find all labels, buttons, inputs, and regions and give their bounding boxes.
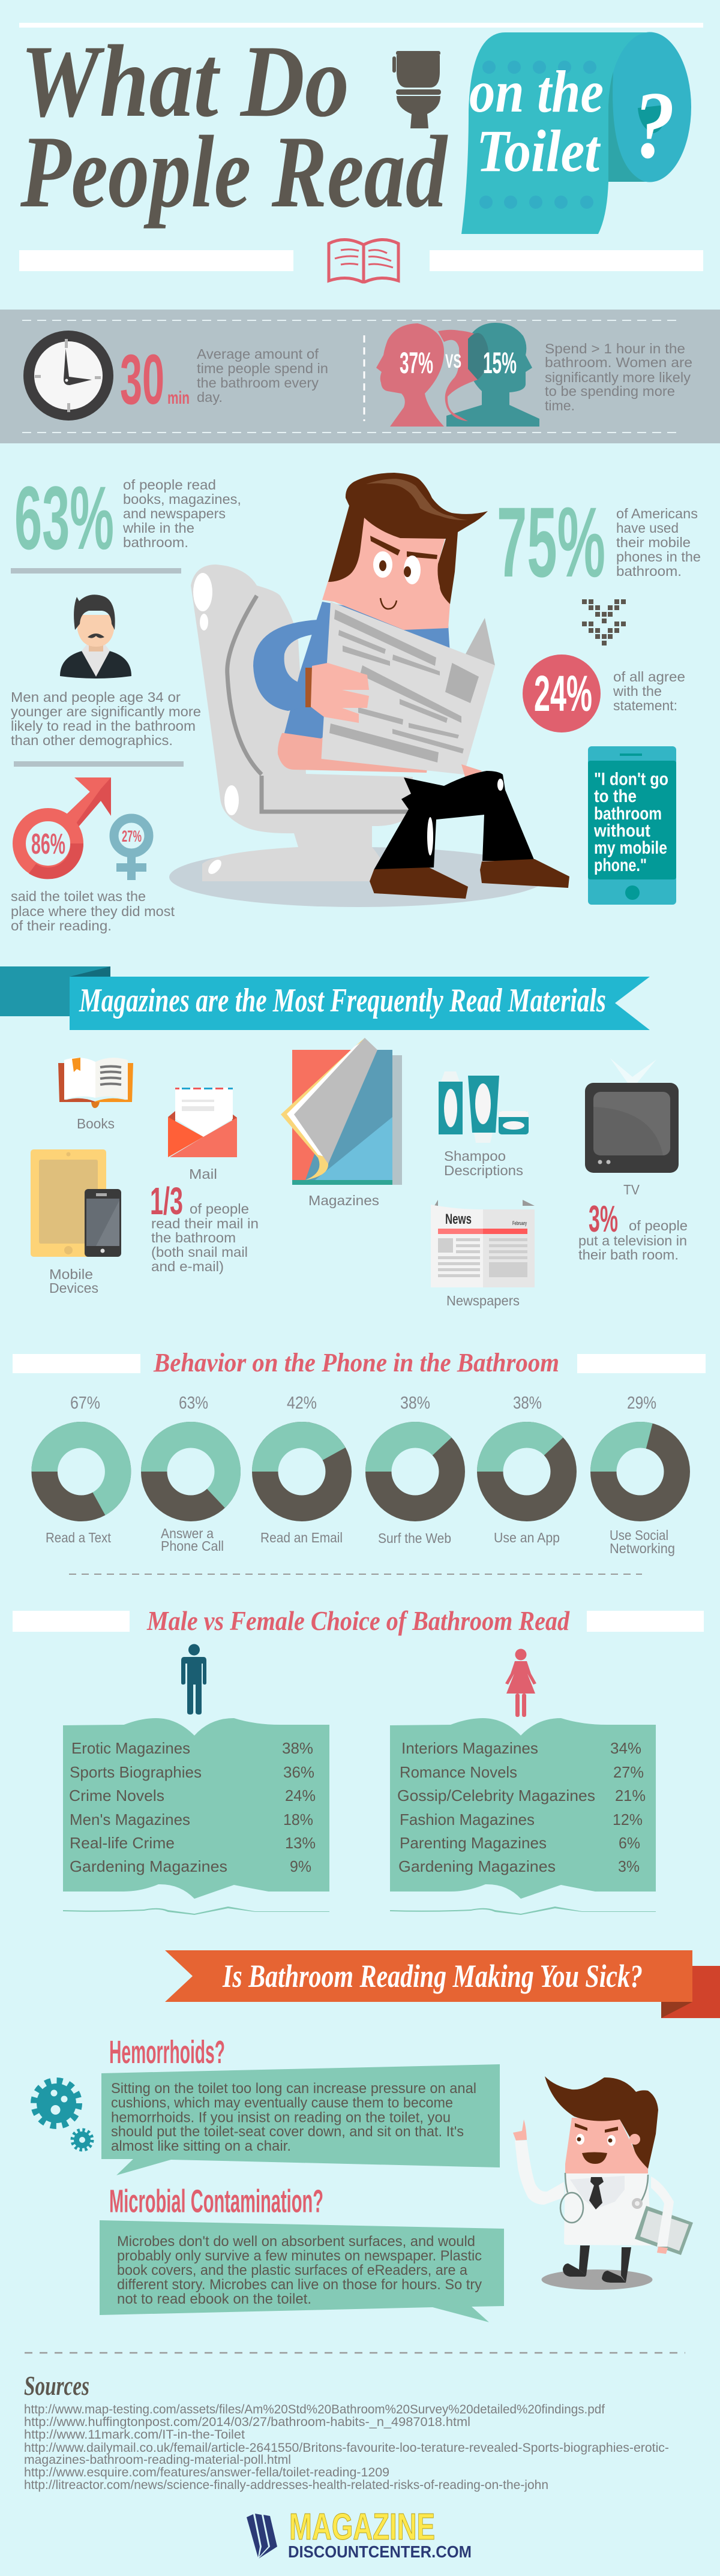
stat: 24 percent: of all agree [613,669,685,684]
stat: one third: the bathroom [151,1230,236,1245]
icon: phone with quote: "I don't go [594,769,668,789]
panel: female reading list: 21% [615,1787,646,1805]
logo: magazine discount center: MAGAZINE [289,2506,435,2548]
illustration: man reading newspaper on toilet [169,473,569,907]
panel: female reading list: 27% [613,1763,644,1781]
donut: surf the web 38% [365,1394,465,1546]
stat: 30 min: min [167,388,190,408]
stat: 75 percent: of Americans [616,506,698,521]
icon: mail: Mail [189,1166,217,1182]
text: sources list: http://www.dailymail.co.uk/femail/article-2641550/Britons-favourite-loo-terature-revealed-Sports-biographies-erotic- [24,2441,669,2455]
icon: woman and man heads: 37% [400,346,433,380]
panel: male reading list: Sports Biographies [70,1763,202,1781]
logo: magazine discount center: DISCOUNTCENTER.COM [288,2542,472,2561]
stat: 63 percent: 63% [14,467,114,568]
stat: 63 percent: books, magazines, [123,491,241,507]
stat: 3 percent: of people [629,1218,688,1233]
stat: one third: (both snail mail [151,1244,248,1260]
stat: 3 percent: put a television in [578,1233,687,1248]
text: more than one hour: significantly more likely [545,370,691,385]
stat: one third: and e-mail) [151,1259,224,1274]
panel: male reading list: Men's Magazines [70,1811,190,1829]
icon: woman and man heads: VS [445,350,461,372]
stat: 75 percent: phones in the [616,549,701,565]
text: more than one hour: to be spending more [545,383,675,399]
icon: pixel hearts [582,599,626,645]
heading: sources: Sources [24,2370,89,2401]
icon: books: Books [77,1116,115,1131]
text: more than one hour: Spend > 1 hour in the [545,341,685,356]
stat: 30 min: 30 [120,340,164,419]
panel: time in bathroom stats [0,310,720,443]
text: sources list: http://www.map-testing.com/assets/files/Am%20Std%20Bathroom%20Survey%20detailed%20findings.pdf [24,2403,605,2416]
donut: use social networking 29%: 29% [627,1394,656,1413]
donut: read an email 42% [252,1394,352,1545]
panel: male reading list: 9% [290,1857,311,1875]
callout: hemorrhoids [101,2064,500,2175]
text: toilet place of reading [11,888,175,933]
icon: woman and man heads: 15% [483,346,517,380]
callout: microbial contamination [100,2220,504,2322]
donut: use an app 38%: 38% [513,1394,542,1413]
donut: read a text 67%: Read a Text [46,1530,112,1545]
panel: female reading list: 6% [619,1834,640,1852]
callout: microbial contamination: different story. Microbes can live on those for hours. So try [117,2277,482,2293]
donut: use social networking 29%: Use Social [610,1527,668,1543]
icon: toilet [392,51,441,128]
text: sources list: http://www.esquire.com/features/answer-fella/toilet-reading-1209 [24,2466,389,2479]
panel: female reading list: 34% [610,1739,641,1757]
panel: female reading list: Fashion Magazines [400,1811,535,1829]
title: People Read [20,115,448,229]
stat: 63 percent: of people read [123,477,216,493]
callout: microbial contamination: book covers, and the plastic surfaces of eReaders, are a [117,2262,468,2278]
donut: read a text 67%: 67% [70,1394,100,1413]
text: men and younger people: likely to read in the bathroom [11,718,196,734]
icon: newspaper: February [512,1220,527,1226]
callout: microbial contamination: probably only survive a few minutes on newspaper. Plastic [117,2248,482,2264]
icon: shampoo [439,1071,529,1178]
icon: mobile devices: Devices [49,1280,98,1296]
donut: use social networking 29%: Networking [610,1541,675,1556]
stat: 75 percent: 75% [497,487,605,598]
ribbon heading: making you sick [165,1950,720,2018]
panel: male reading list: 36% [283,1763,314,1781]
donut: answer a phone call 63% [141,1394,241,1554]
donut: answer a phone call 63%: Phone Call [161,1538,224,1554]
donut: use an app 38%: Use an App [494,1530,560,1545]
text: average time: day. [197,389,223,405]
icon: gears [34,2081,92,2149]
callout: microbial contamination: not to read ebook on the toilet. [117,2291,311,2307]
title [20,25,448,229]
stat: 63 percent: bathroom. [123,535,188,550]
icon: shampoo: Shampoo [444,1148,506,1164]
icon: phone with quote: phone." [594,855,647,875]
donut: read an email 42%: Read an Email [260,1530,343,1545]
icon: newspaper: Newspapers [446,1293,520,1308]
callout: hemorrhoids: almost like sitting on a chair. [111,2138,291,2154]
stat: 3 percent [578,1199,688,1262]
panel: male reading list: Erotic Magazines [71,1739,190,1757]
panel: female reading list: 3% [618,1857,640,1875]
stat: 3 percent: their bath room. [578,1247,679,1262]
text: more than one hour [545,341,692,413]
icon: male and female gender stats: 27% [122,827,142,845]
icon: phone with quote: without [593,821,650,841]
text: men and younger people: Men and people age 34 or [11,689,181,705]
icon: male and female gender stats: 86% [31,828,65,860]
heading: behavior on the phone: Behavior on the Phone in the Bathroom [153,1348,559,1377]
stat: 63 percent: and newspapers [123,506,226,521]
panel: female reading list: Parenting Magazines [400,1834,547,1852]
panel: female reading list: 12% [613,1811,643,1829]
panel: male reading list: 24% [285,1787,316,1805]
icon: tv [585,1058,679,1197]
icon: woman and man heads [376,323,539,427]
panel: female reading list: Interiors Magazines [401,1739,538,1757]
panel: male reading list: Crime Novels [69,1787,164,1805]
icon: magazines [281,1038,402,1208]
text: sources list: http://www.huffingtonpost.com/2014/03/27/bathroom-habits-_n_4987018.html [24,2415,470,2429]
icon: phone with quote [588,746,676,905]
stat: one third [150,1179,259,1274]
panel: male reading list: 38% [282,1739,313,1757]
icon: man with mustache [60,595,131,678]
stat: 75 percent: bathroom. [616,563,682,579]
donut: read a text 67% [31,1394,131,1545]
icon: clock [23,331,113,421]
stat: 75 percent: their mobile [616,535,691,550]
stat: 24 percent: 24% [534,665,592,722]
text: toilet place of reading: place where they did most [11,903,175,919]
panel: female reading list: Gardening Magazines [398,1857,556,1875]
stat: one third: read their mail in [151,1215,259,1231]
text: average time [197,346,328,405]
stat: one third: 1/3 [150,1179,183,1223]
donut: use social networking 29% [590,1394,690,1556]
logo: magazine discount center [247,2506,472,2561]
callout: hemorrhoids: should put the toilet-seat cover down, and sit on that. It's [111,2124,464,2140]
text: toilet place of reading: of their reading. [11,918,112,933]
text: men and younger people [11,689,201,748]
donut: answer a phone call 63%: Answer a [161,1526,214,1541]
panel: female reading list [390,1718,656,1915]
icon: mail [168,1088,237,1182]
icon: male and female gender stats [19,777,149,880]
icon: mobile devices [31,1149,121,1296]
stat: 24 percent [523,654,685,732]
icon: open book [329,239,398,282]
icon: phone with quote: my mobile [594,838,667,858]
text: more than one hour: time. [545,398,575,413]
heading: microbial contamination: Microbial Contamination? [109,2184,323,2220]
icon: magazines: Magazines [308,1193,379,1208]
donut: read an email 42%: 42% [287,1394,317,1413]
toilet paper roll: on the [469,58,604,125]
stat: one third: of people [190,1201,249,1217]
donut: answer a phone call 63%: 63% [179,1394,208,1413]
icon: books [58,1058,133,1131]
stat: 75 percent: have used [616,520,679,536]
icon: newspaper: News [445,1211,472,1227]
illustration: doctor [513,2076,693,2290]
icon: female figure [505,1649,536,1717]
toilet paper roll: Toilet [476,118,601,184]
text: average time: the bathroom every [197,375,319,391]
icon: phone with quote: to the [594,786,637,806]
donut: surf the web 38%: 38% [400,1394,430,1413]
panel: male reading list: 18% [283,1811,313,1829]
stat: 24 percent: with the [613,683,662,699]
icon: male figure [181,1644,206,1715]
icon: phone with quote: bathroom [594,804,662,824]
panel: male reading list [63,1718,329,1915]
stat: 24 percent: statement: [613,698,677,713]
text: average time: time people spend in [197,361,328,376]
panel: male reading list: 13% [285,1834,316,1852]
text: sources list [24,2403,669,2492]
panel: female reading list: Gossip/Celebrity Magazines [397,1787,595,1805]
heading: male vs female: Male vs Female Choice of Bathroom Read [146,1605,570,1636]
donut: surf the web 38%: Surf the Web [378,1530,451,1546]
text: sources list: http://litreactor.com/news/science-finally-addresses-health-related-risks-of-reading-on-the-john [24,2478,548,2492]
panel: female reading list: Romance Novels [400,1763,517,1781]
stat: 63 percent: while in the [122,520,194,536]
ribbon heading: magazines [0,966,650,1030]
donut: use an app 38% [477,1394,577,1545]
text: average time: Average amount of [197,346,319,362]
panel: male reading list: Gardening Magazines [70,1857,227,1875]
text: sources list: http://www.11mark.com/IT-in-the-Toilet [24,2428,245,2442]
panel: male reading list: Real-life Crime [70,1834,175,1852]
callout: hemorrhoids: cushions, which may eventually cause them to become [111,2095,453,2111]
callout: hemorrhoids: hemorrhoids. If you insist on reading on the toilet, you [111,2109,451,2126]
callout: hemorrhoids: Sitting on the toilet too long can increase pressure on anal [111,2080,476,2097]
text: sources list: magazines-bathroom-reading-material-poll.html [24,2453,291,2467]
title: What Do [20,25,349,139]
icon: mobile devices: Mobile [49,1266,93,1282]
toilet paper roll [461,32,691,234]
text: toilet place of reading: said the toilet was the [11,888,146,904]
heading: behavior on the phone [13,1348,706,1377]
text: more than one hour: bathroom. Women are [545,355,692,370]
stat: 3 percent: 3% [589,1199,618,1240]
toilet paper roll: ? [634,71,675,178]
callout: microbial contamination: Microbes don't do well on absorbent surfaces, and would [117,2233,475,2250]
icon: tv: TV [623,1182,640,1197]
heading: hemorrhoids: Hemorrhoids? [109,2034,225,2070]
text: men and younger people: younger are significantly more [11,704,201,719]
icon: shampoo: Descriptions [444,1163,523,1178]
text: men and younger people: than other demographics. [11,732,173,748]
icon: newspaper [431,1200,535,1308]
